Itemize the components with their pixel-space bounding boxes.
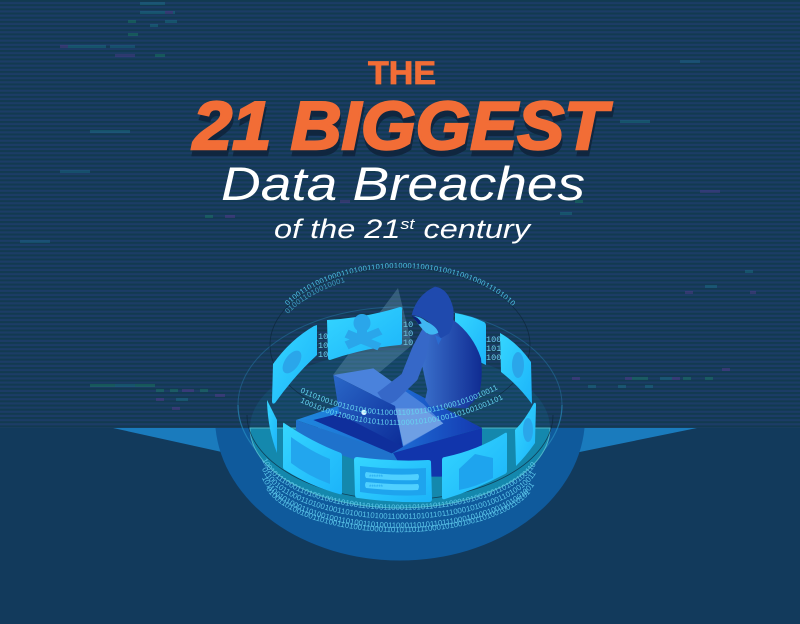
laptop screen bbox=[333, 375, 403, 447]
panel: far right bbox=[500, 333, 532, 404]
dark wire ring bbox=[247, 268, 553, 500]
title line: Data Breaches: Data Breaches bbox=[221, 157, 585, 210]
small binary columns: 1001 bbox=[318, 341, 338, 351]
bottom binary rings: 0110010110001101001001101001101001100011010110111000101001001101001001101010011010010111 bbox=[262, 468, 536, 520]
title line: THE: THE bbox=[368, 55, 436, 91]
hood shadow bbox=[412, 316, 422, 324]
light beam from laptop bbox=[333, 288, 412, 375]
left light wing bbox=[113, 428, 240, 456]
small binary columns: 1010 bbox=[486, 344, 506, 354]
body bbox=[422, 320, 482, 408]
face bbox=[413, 316, 438, 335]
front binary ring: 0110100100110101001100011010110111000101001001101001001 bbox=[300, 385, 498, 416]
subtitle: century bbox=[414, 214, 532, 244]
bottom binary rings: 1001011100011010010011010011010011000110101101110001010010011010010011010100110100101110 bbox=[262, 458, 536, 510]
subtitle: st bbox=[400, 216, 415, 233]
icon: skull and crossbones bbox=[346, 314, 381, 349]
panel: skull bbox=[327, 307, 402, 360]
hood bbox=[412, 287, 454, 338]
title line: 21 BIGGEST: 21 BIGGEST bbox=[191, 88, 613, 164]
hacker bbox=[377, 287, 482, 408]
front binary ring: 1001010011000110101101110001010010011010010011010100110 bbox=[300, 394, 503, 425]
second ring line: 0100110100100011 bbox=[285, 278, 345, 314]
bottom binary rings: 1011001010001101001001101001101001100011010110111000101001001101001001101010011010010110 bbox=[262, 476, 534, 528]
bottom binary rings bbox=[262, 458, 536, 532]
laptop shadow bbox=[313, 413, 403, 453]
panel: browser window bbox=[283, 423, 342, 494]
lower panel background bbox=[0, 428, 800, 624]
background: glitch scanlines bbox=[0, 0, 800, 428]
raised arm bbox=[377, 328, 430, 406]
small binary columns: 1001 bbox=[318, 350, 338, 360]
icon: browser bbox=[291, 437, 330, 484]
top binary ring bbox=[285, 262, 515, 314]
outer glass rings bbox=[238, 307, 562, 508]
small binary columns: 1001 bbox=[486, 335, 506, 345]
small binary columns: 1001 bbox=[318, 332, 338, 342]
icon: envelope bbox=[459, 454, 493, 490]
icon: bug bbox=[279, 347, 305, 377]
small binary columns: 10 bbox=[403, 338, 413, 348]
panel: login form bbox=[354, 457, 432, 502]
panel: far left upright bbox=[267, 400, 277, 453]
field dots: ****** bbox=[369, 485, 384, 491]
icon: right upright mark bbox=[523, 418, 533, 442]
platform bbox=[296, 385, 482, 477]
panel: back right bbox=[455, 313, 486, 365]
panel: bug bbox=[272, 325, 317, 404]
blue bowl bbox=[216, 428, 584, 560]
neck highlight bbox=[435, 335, 442, 345]
title bbox=[191, 55, 614, 244]
top binary ring: 01001101001000110100110100100011001010011001000111010101001011000101 bbox=[285, 262, 515, 306]
logo glint bbox=[361, 410, 367, 415]
bottom binary rings: 0100110100100110100110100110001101011011100010100100110100100110101001101001011100 bbox=[266, 486, 530, 532]
small binary columns bbox=[318, 320, 506, 363]
field dots: ****** bbox=[369, 475, 384, 481]
right light wing bbox=[560, 428, 697, 456]
small binary columns: 10 bbox=[403, 329, 413, 339]
platform left side bbox=[296, 420, 407, 477]
platform side bbox=[393, 428, 482, 477]
panel: far right upright bbox=[515, 403, 536, 466]
password field 2 bbox=[365, 482, 419, 490]
icon: shield bbox=[512, 352, 524, 378]
small binary columns: 1001 bbox=[486, 353, 506, 363]
password field 1 bbox=[365, 472, 419, 480]
panel: envelope bbox=[442, 433, 507, 499]
icon: login box bbox=[360, 466, 426, 496]
laptop base bbox=[333, 368, 443, 447]
field dots bbox=[369, 475, 384, 491]
subtitle: of the 21 bbox=[274, 214, 379, 244]
front binary ring bbox=[300, 385, 503, 425]
title shadow: 21 BIGGEST bbox=[192, 94, 614, 170]
small binary columns: 10 bbox=[403, 320, 413, 330]
keyboard bbox=[395, 408, 443, 446]
